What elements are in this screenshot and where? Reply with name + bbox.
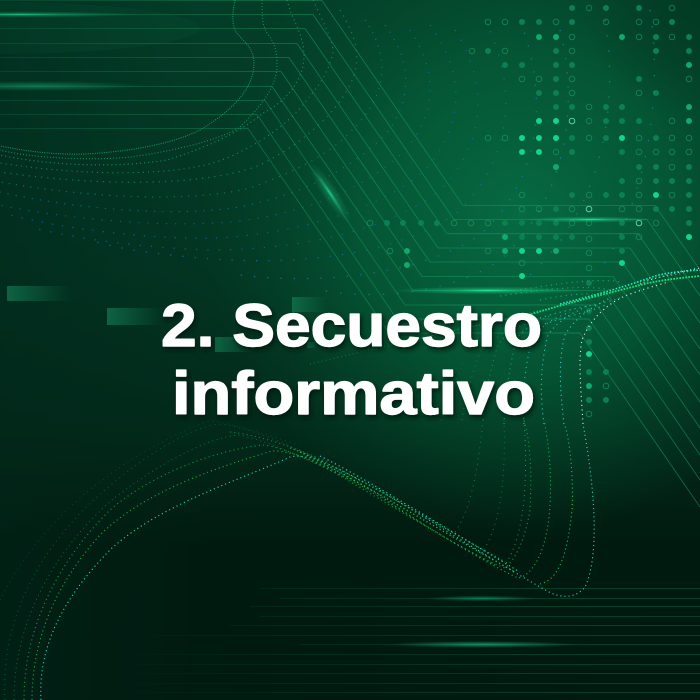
title xyxy=(161,292,542,427)
translucent glitch bars xyxy=(7,286,326,352)
dotted ridge band along the wave xyxy=(230,432,520,572)
diagonal light flare xyxy=(303,159,357,227)
dot matrix: highlighted rings xyxy=(569,118,642,226)
bright wave band at right xyxy=(310,268,700,364)
bottom horizontal light lines xyxy=(40,588,700,692)
bottom line glows xyxy=(387,596,577,648)
title line 1: 2. Secuestro xyxy=(161,292,542,359)
dot matrix: outlined circles xyxy=(367,5,692,417)
dotted contour mesh: upper left xyxy=(0,0,654,295)
dot matrix: bright filled dots xyxy=(522,121,689,354)
dotted wave: lower mesh xyxy=(0,420,594,700)
dot matrix: dim filled dots xyxy=(387,8,689,400)
dotted rising curves joining the ridge xyxy=(420,282,668,565)
circuit lines xyxy=(0,0,700,507)
dot matrix: medium filled dots xyxy=(407,37,689,386)
light streaks on circuit lines xyxy=(0,2,655,294)
title line 2: informativo xyxy=(172,360,535,427)
